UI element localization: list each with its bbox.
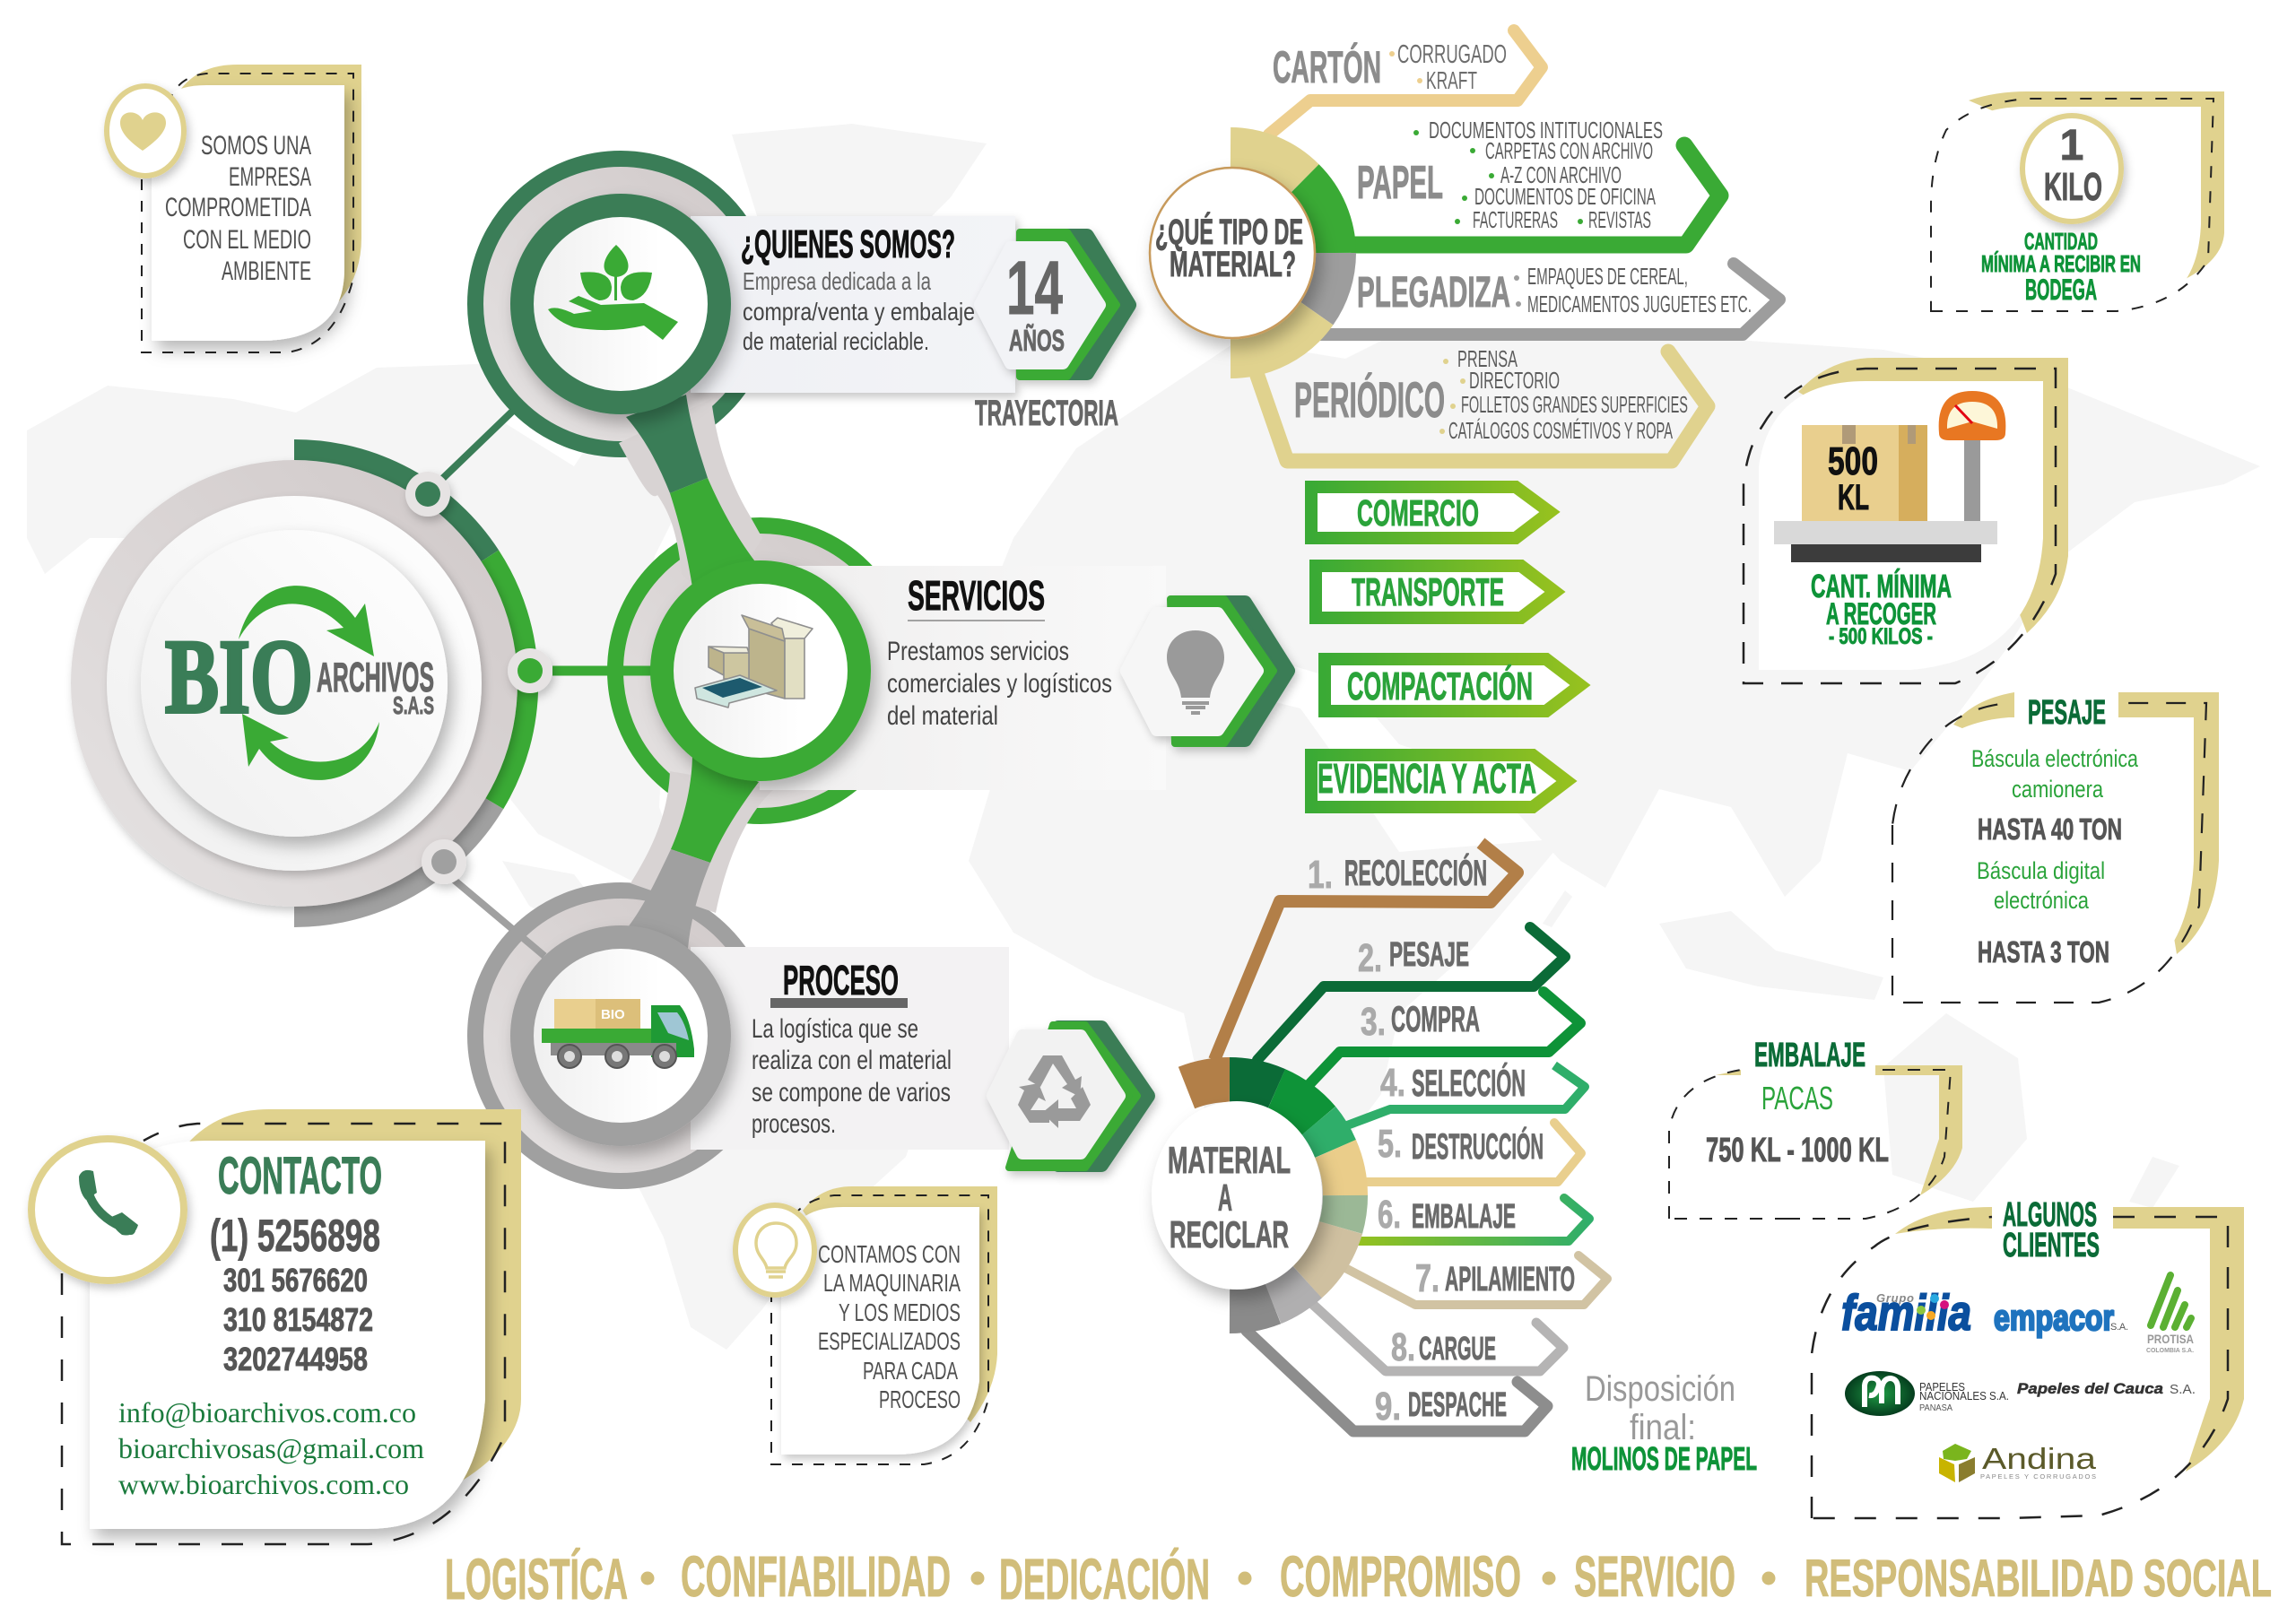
icon: scale with box: 500 bbox=[1828, 439, 1878, 483]
machinery card bbox=[735, 1186, 997, 1464]
icon: recycle arrows bbox=[239, 586, 379, 780]
final disposition: MOLINOS DE PAPEL bbox=[1571, 1440, 1757, 1477]
heading: servicios: SERVICIOS bbox=[908, 572, 1045, 619]
phone numbers bbox=[210, 1211, 380, 1377]
body text: se compone de varios bbox=[752, 1078, 951, 1107]
logo: familia: familia bbox=[1841, 1284, 1971, 1341]
final disposition: final: bbox=[1630, 1408, 1696, 1447]
heading: embalaje: EMBALAJE bbox=[1754, 1037, 1866, 1074]
bottom values strip: DEDICACIÓN bbox=[999, 1547, 1210, 1611]
card text: PROCESO bbox=[879, 1385, 961, 1413]
carton labels: CORRUGADO bbox=[1397, 40, 1507, 69]
panel: quienes somos bbox=[691, 216, 1129, 393]
emails and website: info@bioarchivos.com.co bbox=[118, 1396, 416, 1429]
panel body text: Empresa dedicada a la bbox=[743, 267, 931, 295]
logo: andina: Andina bbox=[1982, 1442, 2097, 1475]
recycling step labels: 3. bbox=[1361, 1000, 1386, 1044]
logo text: S.A.S bbox=[393, 691, 434, 719]
phone numbers: 301 5676620 bbox=[223, 1262, 368, 1298]
panel body text bbox=[743, 267, 975, 355]
card text: ESPECIALIZADOS bbox=[818, 1327, 961, 1355]
heading: contacto: CONTACTO bbox=[218, 1147, 382, 1205]
bottom values strip: LOGISTÍCA bbox=[445, 1547, 628, 1611]
main logo circle bbox=[71, 450, 527, 916]
card: environment commitment bbox=[107, 65, 361, 352]
caption bbox=[1981, 228, 2141, 306]
periodico labels: DIRECTORIO bbox=[1469, 367, 1560, 394]
heading: algunos clientes: CLIENTES bbox=[2003, 1227, 2100, 1264]
heading: algunos clientes bbox=[2003, 1196, 2100, 1264]
card text: COMPROMETIDA bbox=[165, 193, 311, 222]
card text: Y LOS MEDIOS bbox=[839, 1298, 961, 1326]
hub title: MATERIAL bbox=[1168, 1139, 1291, 1181]
card text bbox=[165, 131, 311, 286]
heading: algunos clientes: ALGUNOS bbox=[2003, 1196, 2097, 1234]
connector lines and dots bbox=[405, 411, 651, 956]
logo: familia: Grupo bbox=[1876, 1291, 1914, 1305]
bottom values strip: COMPROMISO bbox=[1280, 1544, 1521, 1609]
icon: truck bbox=[542, 999, 694, 1068]
icon: hand with plant bbox=[548, 245, 678, 340]
logo: protisa: PROTISA bbox=[2147, 1332, 2194, 1346]
card text: CON EL MEDIO bbox=[183, 225, 311, 255]
node 3 ring and icon bbox=[522, 937, 719, 1134]
icon: lightbulb hexagon bbox=[1126, 599, 1288, 743]
recycling step chevrons bbox=[1214, 843, 1607, 1431]
recycling step labels: RECOLECCIÓN bbox=[1344, 852, 1487, 893]
heading: pesaje: PESAJE bbox=[2028, 694, 2106, 732]
card text: SOMOS UNA bbox=[201, 131, 311, 161]
card: 500 kl bbox=[1744, 358, 2068, 683]
heading: proceso: PROCESO bbox=[783, 957, 899, 1003]
body text bbox=[752, 1014, 952, 1139]
trayectoria label: TRAYECTORIA bbox=[975, 394, 1118, 433]
periodico labels: PRENSA bbox=[1457, 345, 1518, 372]
logo: andina: PAPELES Y CORRUGADOS bbox=[1980, 1472, 2096, 1481]
icon: lightbulb outline bbox=[735, 1205, 814, 1295]
body text: procesos. bbox=[752, 1109, 836, 1139]
pacas text: PACAS bbox=[1761, 1080, 1833, 1116]
plegadiza labels: MEDICAMENTOS JUGUETES ETC. bbox=[1527, 291, 1752, 317]
recycling step labels: 8. bbox=[1391, 1325, 1415, 1369]
logo: protisa: COLOMBIA S.A. bbox=[2146, 1348, 2194, 1354]
emails and website bbox=[118, 1396, 424, 1500]
logo: andina bbox=[1939, 1442, 2097, 1482]
card: pesaje bbox=[1892, 690, 2219, 1003]
carton labels: KRAFT bbox=[1426, 66, 1477, 94]
periodico labels bbox=[1294, 345, 1688, 444]
recycling step labels: 9. bbox=[1375, 1385, 1401, 1429]
papel labels: FACTURERAS bbox=[1473, 206, 1558, 233]
logo: papeles nacionales: PANASA bbox=[1919, 1403, 1952, 1413]
papel labels: REVISTAS bbox=[1588, 206, 1651, 233]
badge: 14 años: 14 bbox=[1006, 246, 1063, 330]
caption: CANTIDAD bbox=[2024, 228, 2098, 255]
logo: papeles del cauca: Papeles del Cauca bbox=[2017, 1380, 2163, 1397]
badge: 14 años: AÑOS bbox=[1009, 324, 1065, 357]
arrow: comercio bbox=[1311, 487, 1550, 538]
card text: HASTA 3 TON bbox=[1978, 935, 2109, 968]
recycling step labels: APILAMIENTO bbox=[1445, 1261, 1575, 1298]
arrow: evidencia y acta: EVIDENCIA Y ACTA bbox=[1318, 755, 1536, 802]
panel body text: de material reciclable. bbox=[743, 327, 929, 355]
plegadiza labels bbox=[1357, 263, 1752, 317]
contact card bbox=[31, 1109, 521, 1544]
recycling step labels: SELECCIÓN bbox=[1412, 1061, 1526, 1104]
card text: LA MAQUINARIA bbox=[823, 1269, 961, 1297]
chevron: plegadiza bbox=[1320, 264, 1779, 334]
recycling step labels bbox=[1308, 852, 1575, 1429]
papel labels: CARPETAS CON ARCHIVO bbox=[1485, 137, 1653, 164]
recycling step labels: 2. bbox=[1358, 936, 1382, 980]
card text: Báscula digital bbox=[1977, 857, 2105, 884]
chevron: papel bbox=[1354, 145, 1720, 245]
emails and website: bioarchivosas@gmail.com bbox=[118, 1432, 424, 1464]
icon: boxes bbox=[695, 615, 813, 708]
hub title: A bbox=[1218, 1177, 1232, 1219]
card text: PARA CADA bbox=[863, 1357, 958, 1385]
arrow: compactacion bbox=[1325, 659, 1580, 711]
recycling hub bbox=[1152, 1080, 1345, 1311]
final disposition bbox=[1571, 1369, 1757, 1477]
arrow: evidencia y acta bbox=[1311, 755, 1567, 807]
caption: A RECOGER bbox=[1826, 597, 1936, 631]
periodico labels: PERIÓDICO bbox=[1294, 371, 1445, 428]
chevron: carton bbox=[1269, 30, 1542, 135]
card text bbox=[1971, 745, 2139, 968]
recycling step labels: COMPRA bbox=[1391, 1000, 1480, 1039]
weight range: 750 KL - 1000 KL bbox=[1706, 1132, 1889, 1169]
card: embalaje bbox=[1669, 1037, 1962, 1219]
node discs bbox=[475, 159, 906, 1181]
logo: papeles nacionales: PAPELES bbox=[1919, 1380, 1965, 1394]
node 2 ring and icon bbox=[662, 572, 859, 769]
panel body text: compra/venta y embalaje bbox=[743, 298, 975, 326]
body text: La logística que se bbox=[752, 1014, 918, 1044]
logo: papeles nacionales: NACIONALES S.A. bbox=[1919, 1389, 2009, 1403]
recycling step labels: DESPACHE bbox=[1408, 1386, 1507, 1424]
papel labels: DOCUMENTOS DE OFICINA bbox=[1474, 183, 1656, 210]
badge: 1 kilo: KILO bbox=[2044, 165, 2102, 209]
recycling step labels: 6. bbox=[1378, 1193, 1401, 1237]
papel labels: A-Z CON ARCHIVO bbox=[1500, 161, 1622, 188]
recycling step labels: CARGUE bbox=[1419, 1330, 1496, 1367]
card: algunos clientes bbox=[1812, 1196, 2244, 1518]
phone numbers: (1) 5256898 bbox=[210, 1211, 380, 1261]
periodico labels: CATÁLOGOS COSMÉTIVOS Y ROPA bbox=[1448, 417, 1673, 444]
bottom values strip bbox=[445, 1544, 2272, 1611]
phone numbers: 310 8154872 bbox=[223, 1301, 373, 1338]
caption: MÍNIMA A RECIBIR EN bbox=[1981, 250, 2141, 277]
papel labels bbox=[1357, 117, 1663, 233]
recycling step labels: DESTRUCCIÓN bbox=[1412, 1125, 1544, 1167]
hub title bbox=[1155, 212, 1303, 284]
arrow: comercio: COMERCIO bbox=[1357, 492, 1479, 534]
body text: del material bbox=[887, 701, 998, 731]
hub title: RECICLAR bbox=[1170, 1213, 1289, 1255]
hub title bbox=[1168, 1139, 1291, 1255]
body text: comerciales y logísticos bbox=[887, 669, 1112, 699]
icon: truck: BIO bbox=[601, 1007, 625, 1022]
hub title: ¿QUÉ TIPO DE bbox=[1155, 212, 1303, 252]
panel: servicios bbox=[760, 566, 1288, 790]
logo text: ARCHIVOS bbox=[317, 654, 434, 700]
papel labels: PAPEL bbox=[1357, 157, 1443, 209]
papel labels: DOCUMENTOS INTITUCIONALES bbox=[1429, 117, 1663, 143]
node 1 ring and icon bbox=[522, 205, 719, 403]
periodico labels: FOLLETOS GRANDES SUPERFICIES bbox=[1461, 391, 1688, 418]
logo: papeles nacionales bbox=[1845, 1371, 2009, 1416]
logo: protisa bbox=[2146, 1275, 2194, 1354]
card text bbox=[818, 1240, 961, 1413]
final disposition: Disposición bbox=[1585, 1369, 1735, 1409]
badge: 1 kilo: 1 bbox=[2060, 122, 2083, 169]
card text: CONTAMOS CON bbox=[818, 1240, 961, 1268]
plegadiza labels: EMPAQUES DE CEREAL, bbox=[1527, 263, 1688, 290]
service arrows bbox=[1311, 487, 1580, 807]
logo: papeles del cauca: S.A. bbox=[2170, 1382, 2196, 1397]
recycling step labels: 5. bbox=[1378, 1122, 1402, 1166]
body text: Prestamos servicios bbox=[887, 637, 1069, 666]
hub title: MATERIAL? bbox=[1170, 245, 1296, 284]
icon: scale with box: KL bbox=[1838, 478, 1869, 517]
recycling step labels: 4. bbox=[1380, 1061, 1405, 1105]
chevron: periodico bbox=[1257, 352, 1708, 461]
logo: empacor: empacor bbox=[1994, 1298, 2114, 1338]
recycling step labels: EMBALAJE bbox=[1412, 1198, 1516, 1236]
badge: 14 años bbox=[980, 232, 1129, 377]
recycling step labels: PESAJE bbox=[1389, 936, 1469, 974]
plegadiza labels: PLEGADIZA bbox=[1357, 269, 1510, 317]
card text: HASTA 40 TON bbox=[1978, 812, 2122, 846]
heading: quienes somos: ¿QUIENES SOMOS? bbox=[741, 222, 955, 266]
icon: recycle hexagon bbox=[993, 1025, 1148, 1168]
recycling step labels: 7. bbox=[1415, 1256, 1439, 1300]
emails and website: www.bioarchivos.com.co bbox=[118, 1468, 409, 1500]
card: 1 kilo bbox=[1931, 91, 2224, 311]
recycling step labels: 1. bbox=[1308, 853, 1333, 897]
caption bbox=[1811, 568, 1952, 649]
card text: Báscula electrónica bbox=[1971, 745, 2139, 772]
caption: BODEGA bbox=[2025, 274, 2097, 306]
badge: 1 kilo bbox=[2022, 116, 2121, 221]
bottom values strip: CONFIABILIDAD bbox=[681, 1544, 951, 1609]
card text: AMBIENTE bbox=[222, 256, 311, 286]
arrow: transporte: TRANSPORTE bbox=[1352, 570, 1504, 614]
body text: realiza con el material bbox=[752, 1046, 952, 1075]
carton labels: CARTÓN bbox=[1273, 42, 1381, 92]
card text: EMPRESA bbox=[229, 162, 311, 192]
bottom values strip: SERVICIO bbox=[1574, 1544, 1735, 1609]
icon: heart bbox=[107, 86, 184, 176]
caption: CANT. MÍNIMA bbox=[1811, 568, 1952, 604]
body text bbox=[887, 637, 1112, 731]
panel: proceso bbox=[691, 947, 1148, 1168]
arrow: transporte bbox=[1316, 566, 1555, 618]
arrow: compactacion: COMPACTACIÓN bbox=[1347, 664, 1533, 708]
connector stems bbox=[619, 395, 774, 949]
card text: electrónica bbox=[1994, 887, 2090, 914]
world map background bbox=[27, 124, 2260, 1350]
card text: camionera bbox=[2012, 776, 2104, 803]
material type hub bbox=[1150, 150, 1334, 356]
phone numbers: 3202744958 bbox=[223, 1341, 368, 1377]
logo: empacor: S.A. bbox=[2110, 1322, 2128, 1333]
material type chevrons bbox=[1257, 30, 1779, 461]
logo text: BIO bbox=[165, 618, 313, 735]
icon: phone bbox=[31, 1139, 184, 1281]
icon: scale with box bbox=[1774, 391, 2005, 562]
caption: - 500 KILOS - bbox=[1829, 624, 1933, 649]
